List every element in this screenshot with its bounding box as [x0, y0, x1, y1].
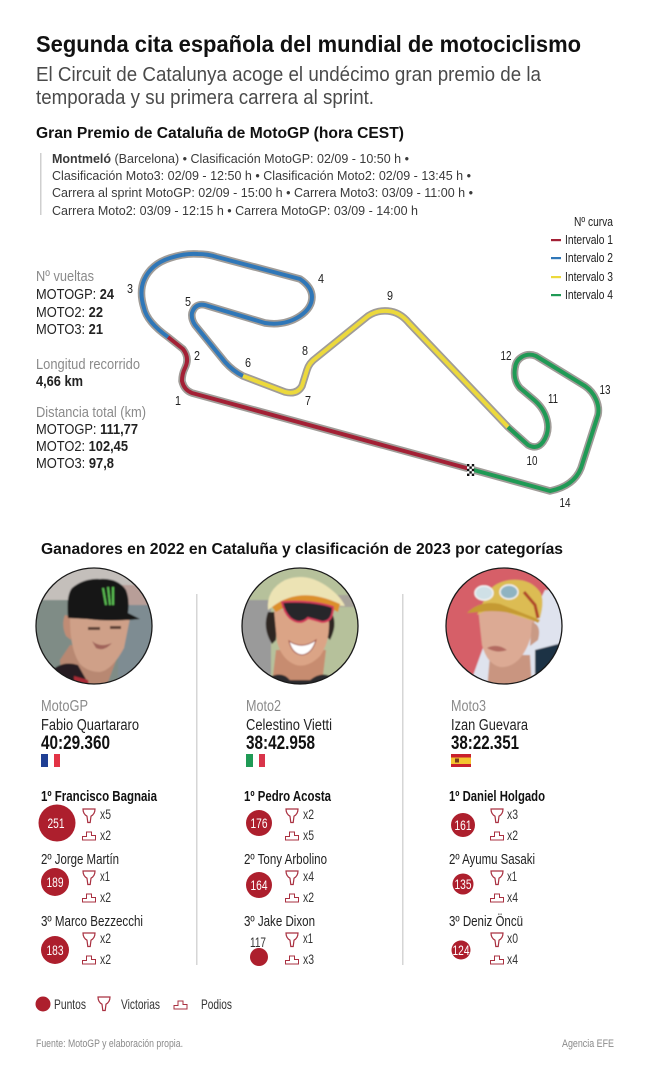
heading: race schedule: Gran Premio de Cataluña de MotoGP (hora CEST): [36, 125, 404, 142]
circuit map: [142, 254, 598, 491]
standings: Moto3: x0: [507, 930, 518, 946]
curve numbers: 13: [600, 382, 610, 397]
curve numbers: 5: [185, 294, 191, 309]
schedule text block: Clasificación Moto3: 02/09 - 12:50 h • Clasificación Moto2: 02/09 - 13:45 h •: [52, 169, 471, 183]
legend: points, wins, podiums: [36, 996, 232, 1012]
credit: Agencia EFE: [562, 1038, 614, 1050]
standings: Moto3: 124: [452, 942, 470, 958]
title: Segunda cita española del mundial de motociclismo: [36, 31, 581, 57]
photo: Celestino Vietti: [241, 568, 359, 690]
circuit stats: 4,66 km: [36, 373, 83, 390]
column dividers: [196, 594, 404, 965]
circuit stats: [36, 268, 146, 472]
subtitle: [36, 64, 542, 109]
schedule text block: Montmeló (Barcelona) • Clasificación MotoGP: 02/09 - 10:50 h •: [52, 152, 409, 166]
winner: MotoGP: MotoGP: [41, 698, 88, 715]
standings: Moto2: x5: [303, 827, 314, 843]
schedule text block: Carrera Moto2: 03/09 - 12:15 h • Carrera MotoGP: 03/09 - 14:00 h: [52, 204, 418, 218]
standings: Moto2: x3: [303, 951, 314, 967]
legend: circuit intervals: [551, 215, 613, 302]
curve numbers: 8: [302, 343, 308, 358]
standings: Moto2: 164: [250, 877, 268, 893]
standings: Moto2: x2: [303, 806, 314, 822]
standings: MotoGP: 183: [46, 942, 64, 958]
standings: Moto3: 2º Ayumu Sasaki: [449, 852, 535, 868]
winner: Moto3: [451, 698, 528, 767]
legend: circuit intervals: Nº curva: [574, 215, 613, 229]
standings: MotoGP: x2: [100, 930, 111, 946]
subtitle: temporada y su primera carrera al sprint.: [36, 87, 374, 109]
standings: Moto2: 176: [250, 815, 268, 831]
photo: Fabio Quartararo: [36, 568, 152, 690]
winner: MotoGP: [41, 698, 139, 767]
winner: Moto3: Moto3: [451, 698, 486, 715]
standings: MotoGP: 3º Marco Bezzecchi: [41, 914, 143, 930]
curve numbers: 7: [305, 393, 311, 408]
standings: Moto3: 135: [454, 876, 472, 892]
subtitle: El Circuit de Catalunya acoge el undécimo gran premio de la: [36, 64, 542, 86]
curve numbers: 10: [526, 453, 538, 468]
legend: circuit intervals: Intervalo 3: [565, 270, 613, 284]
standings: Moto3: x4: [507, 889, 518, 905]
standings: Moto2: x1: [303, 930, 313, 946]
winner: MotoGP: Fabio Quartararo: [41, 717, 139, 734]
standings: Moto3: 1º Daniel Holgado: [449, 789, 545, 805]
standings: MotoGP: [38, 789, 158, 967]
standings: Moto3: x2: [507, 827, 518, 843]
standings: Moto3: 3º Deniz Öncü: [449, 912, 523, 930]
standings: MotoGP: 251: [48, 815, 65, 831]
schedule text block: [40, 152, 473, 218]
circuit stats: Distancia total (km): [36, 404, 146, 421]
standings: Moto2: [244, 789, 332, 967]
heading: winners: Ganadores en 2022 en Cataluña y clasificación de 2023 por categorías: [41, 541, 563, 558]
winner: Moto2: Celestino Vietti: [246, 717, 332, 734]
standings: Moto2: x4: [303, 868, 314, 884]
legend: circuit intervals: Intervalo 4: [565, 288, 613, 302]
circuit stats: MOTO2: 102,45: [36, 438, 128, 455]
legend: points, wins, podiums: Podios: [201, 996, 232, 1012]
curve numbers: 2: [194, 348, 200, 363]
winner: Moto3: 38:22.351: [451, 733, 519, 754]
flag: France: [41, 754, 60, 767]
standings: MotoGP: x1: [100, 868, 110, 884]
circuit stats: MOTO3: 21: [36, 321, 103, 338]
curve numbers: 6: [245, 355, 251, 370]
standings: MotoGP: 2º Jorge Martín: [41, 852, 119, 868]
winner: Moto2: [246, 698, 332, 767]
standings: Moto3: 161: [454, 817, 472, 833]
standings: Moto2: 3º Jake Dixon: [244, 914, 315, 930]
curve numbers: 3: [127, 281, 133, 296]
circuit stats: MOTO2: 22: [36, 304, 103, 321]
circuit stats: Longitud recorrido: [36, 356, 140, 373]
standings: Moto2: 1º Pedro Acosta: [244, 789, 332, 805]
winner: Moto2: Moto2: [246, 698, 281, 715]
standings: MotoGP: x2: [100, 889, 111, 905]
curve numbers: 11: [548, 391, 558, 406]
icon: chequered finish line: [467, 464, 474, 476]
winner: Moto3: Izan Guevara: [451, 717, 528, 734]
source: Fuente: MotoGP y elaboración propia.: [36, 1038, 183, 1050]
standings: Moto3: x4: [507, 951, 518, 967]
winner: Moto2: 38:42.958: [246, 733, 315, 754]
circuit stats: MOTOGP: 111,77: [36, 421, 138, 438]
schedule text block: Carrera al sprint MotoGP: 02/09 - 15:00 h • Carrera Moto3: 03/09 - 11:00 h •: [52, 186, 473, 200]
standings: MotoGP: x2: [100, 827, 111, 843]
curve numbers: 9: [387, 288, 393, 303]
circuit stats: MOTO3: 97,8: [36, 455, 114, 472]
standings: MotoGP: 189: [46, 874, 64, 890]
standings: Moto2: x2: [303, 889, 314, 905]
standings: Moto2: 117: [250, 934, 266, 950]
curve numbers: 1: [175, 393, 181, 408]
winner: MotoGP: 40:29.360: [41, 733, 110, 754]
flag: Spain: [451, 754, 471, 767]
circuit stats: Nº vueltas: [36, 268, 94, 285]
standings: MotoGP: 1º Francisco Bagnaia: [41, 789, 158, 805]
circuit stats: MOTOGP: 24: [36, 286, 115, 303]
curve numbers: [127, 271, 610, 510]
standings: Moto3: [449, 789, 545, 967]
legend: points, wins, podiums: Victorias: [121, 996, 160, 1012]
legend: points, wins, podiums: Puntos: [54, 996, 86, 1012]
legend: circuit intervals: Intervalo 2: [565, 251, 613, 265]
curve numbers: 14: [560, 495, 570, 510]
standings: Moto2: 2º Tony Arbolino: [244, 852, 327, 868]
standings: MotoGP: x2: [100, 951, 111, 967]
legend: circuit intervals: Intervalo 1: [565, 233, 613, 247]
flag: Italy: [246, 754, 265, 767]
curve numbers: 4: [318, 271, 324, 286]
standings: Moto3: x1: [507, 868, 517, 884]
curve numbers: 12: [500, 348, 512, 363]
standings: Moto3: x3: [507, 806, 518, 822]
photo: Izan Guevara: [446, 568, 562, 690]
standings: MotoGP: x5: [100, 806, 111, 822]
